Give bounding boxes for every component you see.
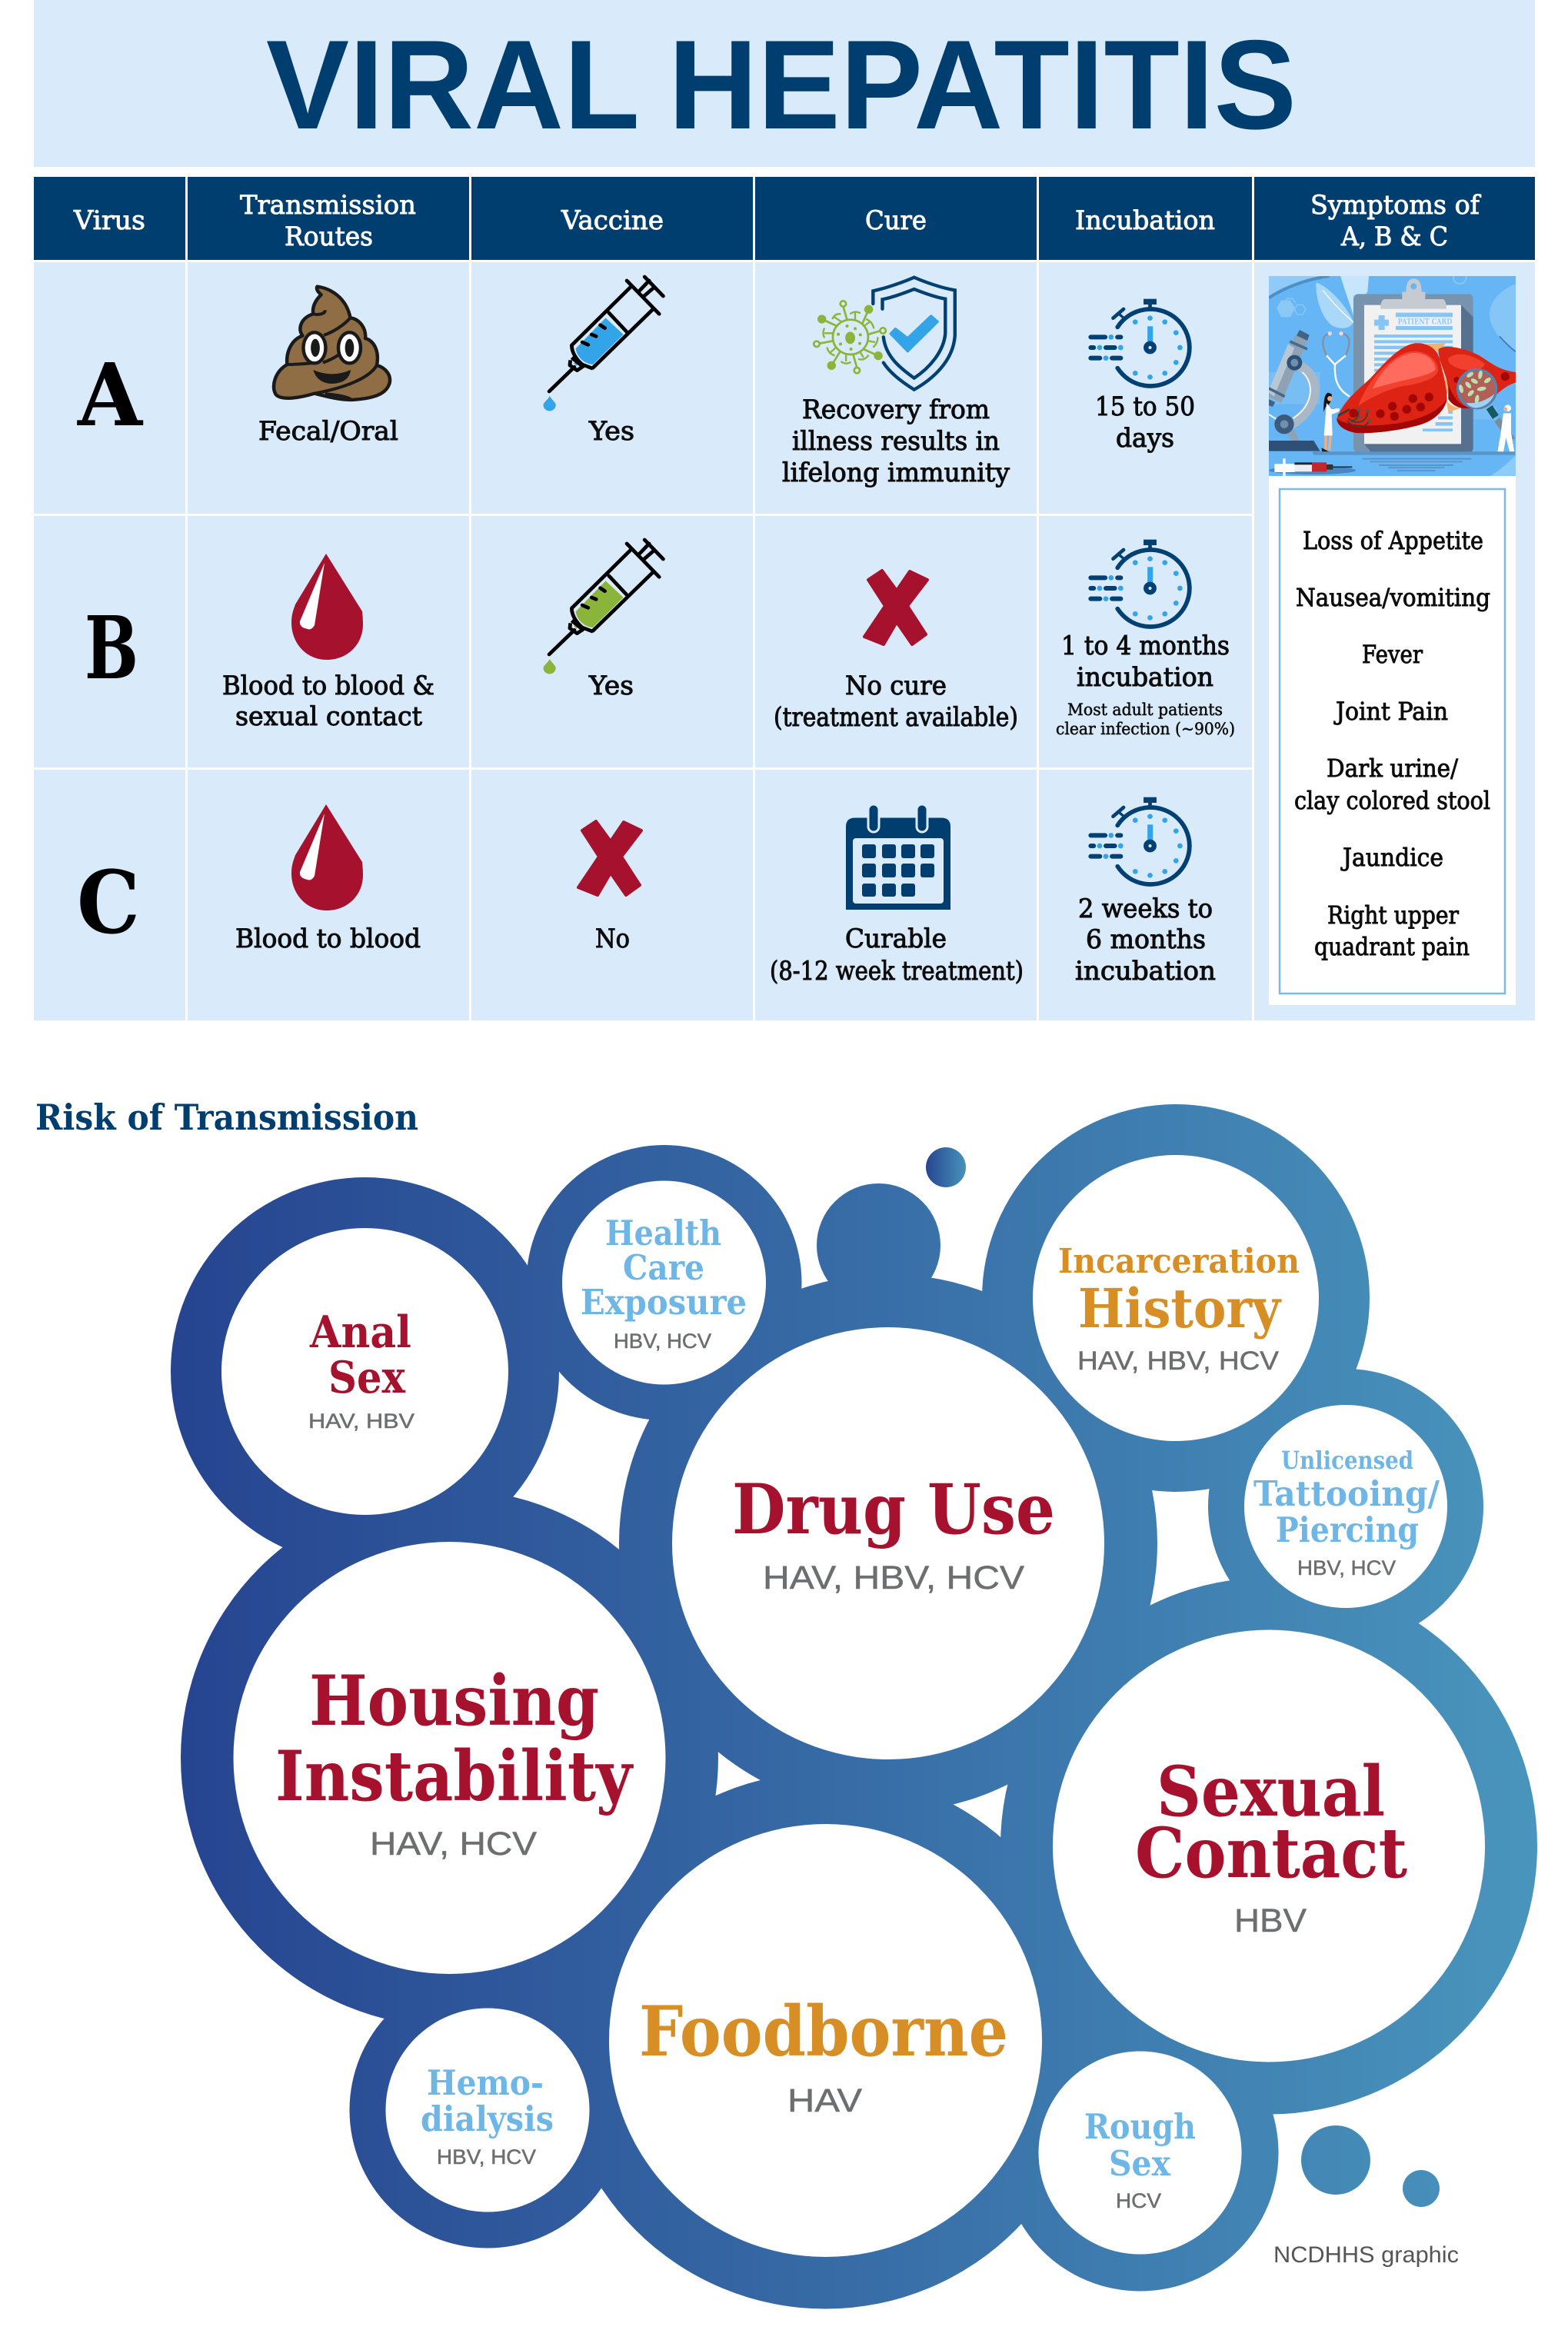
- bubble: tattooing piercing: Tattooing/: [1253, 1473, 1440, 1514]
- icon: smiling poop: [274, 287, 390, 400]
- doctor left: [1323, 393, 1332, 412]
- bubble: sexual contact: HBV: [1234, 1902, 1307, 1939]
- bubble: rough sex: [1084, 2106, 1196, 2212]
- text: recovery: lifelong immunity: [782, 458, 1010, 488]
- text: 1 to 4 months: clear infection (~90%): [1056, 720, 1235, 738]
- doctor right: [1504, 404, 1511, 411]
- row B: [85, 540, 1235, 738]
- bubble: foodborne: HAV: [787, 2082, 862, 2119]
- table header row: [34, 177, 1535, 260]
- row A: [77, 277, 1195, 488]
- symptom: dark urine: [1294, 754, 1490, 815]
- bubble: anal sex: Anal: [309, 1306, 411, 1358]
- icon: calendar: [846, 804, 950, 910]
- text: recovery: Recovery from: [802, 394, 990, 425]
- icon: virus and shield: [814, 278, 955, 390]
- microscope: [1288, 364, 1314, 426]
- bubble: anal sex: [308, 1306, 414, 1433]
- symptom: joint pain: Joint Pain: [1333, 697, 1448, 726]
- bubble: tattooing piercing: Piercing: [1276, 1510, 1419, 1550]
- bubble: incarceration history: Incarceration: [1058, 1242, 1300, 1281]
- bubble: rough sex: Rough: [1084, 2106, 1196, 2147]
- bubble: health care exposure: Care: [623, 1247, 704, 1288]
- text: 1 to 4 months: [1056, 631, 1235, 738]
- bubble: sexual contact: Sexual: [1157, 1751, 1385, 1832]
- symptom: dark urine: Dark urine/: [1327, 754, 1458, 783]
- text: curable: [770, 924, 1024, 987]
- bubble: drug use: [732, 1469, 1055, 1596]
- bubble: housing instability: Housing: [309, 1660, 599, 1742]
- magnifier: [1490, 408, 1496, 417]
- header: transmission routes: [240, 190, 416, 252]
- title: [266, 14, 1297, 155]
- bubble: incarceration history: History: [1078, 1277, 1282, 1340]
- icon: red X: [578, 821, 641, 895]
- text: 15 to 50 days: days: [1116, 423, 1174, 454]
- liver: [1425, 343, 1463, 412]
- small syringe: [1269, 468, 1357, 474]
- header: virus: Virus: [73, 205, 145, 236]
- bubble: incarceration history: HAV, HBV, HCV: [1077, 1346, 1279, 1376]
- text: 2 weeks to 6 months: [1075, 894, 1216, 987]
- text: yes: Yes: [588, 416, 634, 447]
- bubble: housing instability: Instability: [275, 1736, 634, 1817]
- bubble: hemodialysis: [421, 2062, 554, 2169]
- header: incubation: Incubation: [1075, 205, 1215, 236]
- bubble: health care exposure: HBV, HCV: [614, 1330, 711, 1353]
- text: 2 weeks to 6 months: 2 weeks to: [1078, 894, 1213, 924]
- bubble: anal sex: HAV, HBV: [308, 1410, 414, 1433]
- bubble: tattooing piercing: HBV, HCV: [1297, 1556, 1396, 1579]
- ground: [1313, 451, 1515, 455]
- patient card label: PATIENT CARD: [1398, 318, 1453, 327]
- icon: stopwatch: [1088, 797, 1190, 884]
- text: recovery: [782, 394, 1010, 488]
- bubble: rough sex: HCV: [1116, 2189, 1161, 2212]
- bubble: health care exposure: Health: [605, 1213, 721, 1253]
- symptom: right upper quadrant pain: Right upper: [1327, 900, 1460, 930]
- symptom: nausea: Nausea/vomiting: [1296, 583, 1490, 612]
- text: no cure: No cure: [845, 671, 947, 701]
- title: VIRAL: [266, 14, 640, 155]
- text: 1 to 4 months: incubation: [1077, 662, 1213, 693]
- header: symptoms: [1310, 190, 1481, 252]
- bubble: hemodialysis: Hemo-: [427, 2062, 544, 2103]
- illustration: liver and clipboard: [1269, 271, 1516, 477]
- text: no: No: [595, 924, 630, 954]
- bubble: health care exposure: Exposure: [581, 1282, 747, 1323]
- symptom: dark urine: clay colored stool: [1294, 786, 1490, 815]
- text: recovery: illness results in: [792, 426, 1000, 457]
- icon: syringe green: [544, 540, 663, 674]
- text: no cure: [774, 671, 1018, 733]
- text: fecal/oral: Fecal/Oral: [258, 416, 398, 447]
- bubble: tattooing piercing: Unlicensed: [1281, 1446, 1413, 1475]
- letter B: B: [85, 598, 138, 699]
- text: 2 weeks to 6 months: incubation: [1075, 956, 1216, 987]
- letter C: C: [77, 853, 140, 954]
- bubble: tattooing piercing: [1253, 1446, 1440, 1579]
- bubble network rings: [171, 1104, 1537, 2308]
- symptom: right upper quadrant pain: quadrant pain: [1314, 932, 1470, 961]
- text: 15 to 50 days: 15 to 50: [1095, 391, 1195, 422]
- icon: red X: [864, 571, 927, 644]
- bubble: rough sex: Sex: [1109, 2143, 1171, 2184]
- bubble: anal sex: Sex: [328, 1352, 406, 1403]
- small gradient dot: [926, 1147, 966, 1187]
- symptom: right upper quadrant pain: [1314, 900, 1470, 961]
- symptom: fever: Fever: [1362, 640, 1423, 669]
- bubble: drug use: HAV, HBV, HCV: [763, 1559, 1024, 1596]
- bubble: incarceration history: [1058, 1242, 1300, 1376]
- text: 15 to 50 days: [1095, 391, 1195, 454]
- icon: stopwatch: [1088, 540, 1190, 627]
- bubble: housing instability: [275, 1660, 634, 1862]
- bubble interiors: [221, 1155, 1485, 2257]
- header: vaccine: Vaccine: [561, 205, 664, 236]
- text: 2 weeks to 6 months: 6 months: [1086, 924, 1206, 955]
- clipboard: [1353, 294, 1473, 452]
- title banner: [34, 0, 1535, 167]
- icon: syringe blue: [544, 277, 663, 411]
- header: transmission routes: Transmission: [240, 190, 416, 221]
- text: blood to blood and sexual contact: sexual contact: [235, 701, 422, 732]
- text: no cure: (treatment available): [774, 702, 1018, 733]
- bubble: housing instability: HAV, HCV: [370, 1826, 537, 1862]
- panel: symptoms: [1269, 271, 1516, 1005]
- text: 1 to 4 months: 1 to 4 months: [1061, 631, 1230, 661]
- header: symptoms: Symptoms of: [1310, 190, 1481, 221]
- text: yes: Yes: [588, 671, 634, 701]
- header: cure: Cure: [865, 205, 927, 236]
- icon: blood drop: [291, 804, 363, 910]
- text: curable: Curable: [845, 924, 947, 954]
- bubble: health care exposure: [581, 1213, 747, 1353]
- bubble: drug use: Drug Use: [732, 1469, 1055, 1550]
- bubble: foodborne: Foodborne: [639, 1991, 1008, 2072]
- symptom: loss of appetite: Loss of Appetite: [1303, 526, 1483, 555]
- credit: NCDHHS graphic: [1273, 2242, 1459, 2268]
- table body background: [34, 262, 1535, 1020]
- bubble: foodborne: [639, 1991, 1008, 2119]
- header: symptoms: A, B & C: [1340, 221, 1448, 252]
- text: 1 to 4 months: Most adult patients: [1067, 701, 1223, 719]
- icon: stopwatch: [1088, 299, 1190, 386]
- text: blood to blood and sexual contact: Blood to blood &: [222, 671, 434, 701]
- text: blood to blood and sexual contact: [222, 671, 434, 732]
- row C: [77, 797, 1216, 987]
- text: curable: (8-12 week treatment): [770, 956, 1024, 987]
- letter A: A: [77, 345, 144, 446]
- bubble: sexual contact: Contact: [1135, 1812, 1407, 1894]
- stethoscope: [1323, 334, 1349, 355]
- bubble: sexual contact: [1135, 1751, 1407, 1939]
- icon: blood drop: [291, 554, 363, 660]
- title: HEPATITIS: [668, 14, 1297, 155]
- bubble: hemodialysis: dialysis: [421, 2099, 554, 2139]
- header: transmission routes: Routes: [285, 221, 373, 252]
- section heading: Risk of Transmission: [35, 1097, 418, 1138]
- bubble: hemodialysis: HBV, HCV: [437, 2145, 536, 2169]
- symptom: jaundice: Jaundice: [1340, 843, 1443, 872]
- text: blood to blood: Blood to blood: [235, 924, 421, 954]
- symptoms list box: [1269, 476, 1516, 1005]
- bubble diagram: risk of transmission: [171, 1104, 1537, 2308]
